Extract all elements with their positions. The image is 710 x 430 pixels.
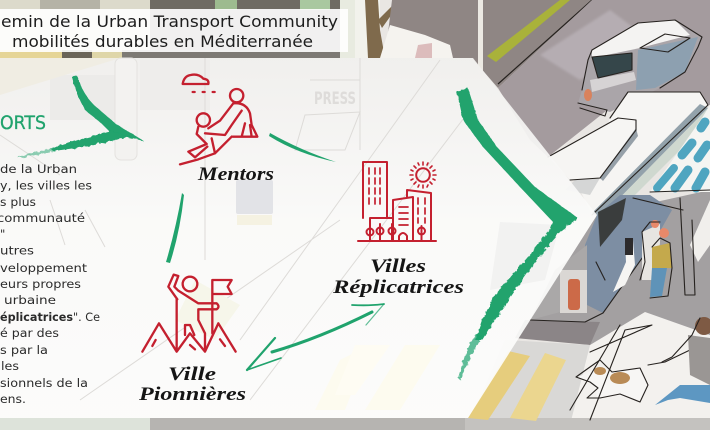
label: Mentors bbox=[197, 164, 274, 185]
icon: climber with flag on summit bbox=[142, 275, 236, 352]
translucent arrow-shaped panel bbox=[0, 58, 597, 418]
arrow: brush arrow into Mentors bbox=[17, 76, 144, 158]
background: top building strip bbox=[0, 0, 592, 88]
section heading: ORTS bbox=[0, 112, 46, 134]
background: bus bbox=[530, 92, 710, 322]
title band bbox=[0, 9, 348, 52]
background: sidewalk and crossing bbox=[530, 190, 710, 345]
faint sketch visible through the panel bbox=[0, 58, 560, 410]
body text block: urbaine bbox=[4, 293, 56, 307]
body text block: les bbox=[1, 359, 19, 373]
body text block: éplicatrices". Ce bbox=[0, 310, 100, 324]
body text block: s plus bbox=[0, 195, 36, 209]
body text block: veloppement bbox=[0, 261, 88, 275]
body text block: ens. bbox=[0, 392, 26, 406]
label: Ville bbox=[168, 364, 217, 385]
background: dog walker bbox=[570, 317, 710, 420]
arrow: Mentors to Ville Pionnières bbox=[166, 193, 184, 263]
subtitle text: mobilités durables en Méditerranée bbox=[12, 33, 313, 51]
body text block: eurs propres bbox=[0, 277, 81, 291]
arrow: Mentors to Villes Réplicatrices bbox=[269, 133, 336, 162]
body text block: y, les villes les bbox=[0, 178, 92, 192]
background: road bbox=[498, 0, 710, 157]
background: parked car bbox=[578, 20, 702, 116]
faint press kiosk sign: PRESS bbox=[314, 89, 356, 109]
title text: emin de la Urban Transport Community bbox=[1, 13, 338, 31]
label second line: Pionnières bbox=[138, 384, 246, 405]
label: Villes bbox=[370, 256, 426, 277]
body text block bbox=[0, 162, 100, 406]
body text block: utres bbox=[0, 244, 34, 258]
body text block: é par des bbox=[0, 326, 59, 340]
node: Mentors bbox=[180, 75, 274, 185]
label second line: Réplicatrices bbox=[332, 277, 464, 298]
body text block: sionnels de la bbox=[0, 376, 88, 390]
arrow: large green brush chevron bbox=[457, 88, 578, 380]
body text block: s par la bbox=[0, 343, 48, 357]
body text block: " bbox=[0, 227, 5, 241]
icon: solar panels on the bus roof bbox=[657, 122, 707, 188]
arrow: double-headed Pionnières and Villes Réplicatrices bbox=[247, 304, 384, 370]
node: Ville Pionnières bbox=[138, 275, 246, 405]
background: people at the bus stop bbox=[613, 220, 672, 298]
icon: city buildings and sun bbox=[358, 162, 436, 241]
node: Villes Réplicatrices bbox=[332, 162, 464, 298]
icon: mentor helping climber bbox=[180, 75, 257, 164]
body text block: de la Urban bbox=[0, 162, 77, 176]
